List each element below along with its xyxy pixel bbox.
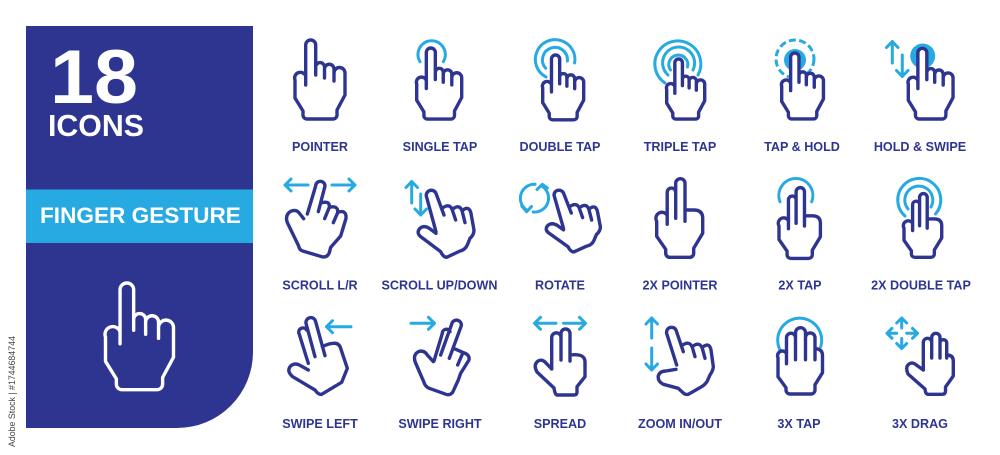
icon: white pointer hand: [105, 283, 174, 390]
icon: swipe left: [289, 318, 351, 394]
label: 3x drag: 3X DRAG: [892, 417, 948, 431]
label: 3x tap: 3X TAP: [777, 417, 821, 431]
icon: swipe right: [411, 317, 469, 395]
icon: double tap: [535, 40, 584, 120]
label: single tap: SINGLE TAP: [403, 140, 477, 154]
icon: 3x drag: [887, 318, 953, 394]
icon: spread: [534, 317, 586, 395]
icon: single tap: [416, 41, 462, 119]
label: triple tap: TRIPLE TAP: [644, 140, 716, 154]
panel: title card: [26, 26, 253, 428]
label: zoom in/out: ZOOM IN/OUT: [638, 417, 722, 431]
icon: scroll left/right: [285, 179, 355, 257]
band: finger gesture: FINGER GESTURE: [40, 203, 241, 228]
heading: 18: 18: [50, 35, 138, 120]
label: tap and hold: TAP & HOLD: [764, 140, 840, 154]
label: spread: SPREAD: [534, 417, 586, 431]
icon: pointer: [295, 40, 345, 119]
credit text: Adobe Stock | #1744684744: [7, 336, 17, 447]
label: 2x double tap: 2X DOUBLE TAP: [871, 278, 971, 292]
label: swipe right: SWIPE RIGHT: [398, 417, 482, 431]
band: finger gesture: [26, 190, 253, 243]
icon: 2x pointer: [656, 179, 703, 257]
label: 2x pointer: 2X POINTER: [643, 278, 717, 292]
label: hold and swipe: HOLD & SWIPE: [874, 140, 966, 154]
icon: 2x double tap: [898, 178, 942, 257]
icon: hold and swipe: [886, 42, 953, 119]
label: swipe left: SWIPE LEFT: [282, 417, 358, 431]
icon: rotate: [520, 184, 600, 252]
heading: icons: ICONS: [48, 110, 144, 143]
icon: tap and hold: [776, 40, 824, 119]
label: double tap: DOUBLE TAP: [520, 140, 600, 154]
label: pointer: POINTER: [292, 140, 348, 154]
icon: zoom in/out: [646, 318, 713, 394]
icon: 2x tap: [778, 179, 820, 258]
icon: triple tap: [655, 41, 705, 119]
label: 2x tap: 2X TAP: [778, 278, 822, 292]
label: rotate: ROTATE: [535, 278, 585, 292]
icon: scroll up/down: [406, 182, 474, 257]
label: scroll left/right: SCROLL L/R: [282, 278, 358, 292]
label: scroll up/down: SCROLL UP/DOWN: [382, 278, 497, 292]
icon: 3x tap: [778, 318, 822, 394]
